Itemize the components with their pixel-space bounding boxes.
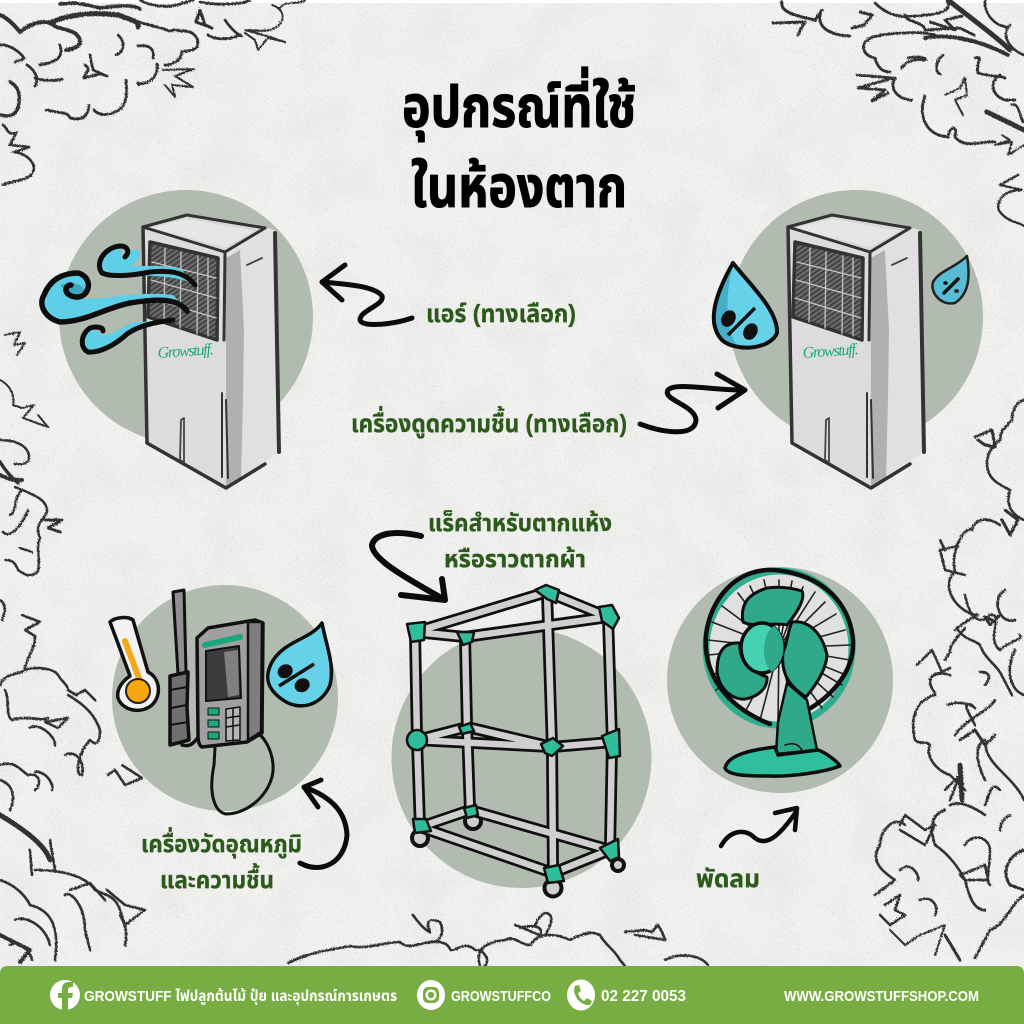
phone number: 02 227 0053 (601, 988, 686, 1005)
label: drying rack: แร็คสำหรับตากแห้ง (428, 509, 612, 537)
label: dehumidifier: เครื่องดูดความชื้น (ทางเลือก) (351, 406, 627, 439)
fan blades (717, 587, 827, 699)
arrow: to dehumidifier (640, 374, 745, 432)
brand script: Growstuff. (802, 341, 859, 362)
arrow: to air cooler (322, 265, 412, 324)
air grille (148, 242, 218, 340)
illustration: drying rack (407, 585, 624, 896)
title: ในห้องตาก (411, 155, 627, 220)
icon: facebook (50, 980, 80, 1010)
foliage: right edge (875, 400, 1024, 960)
illustration: thermometer (110, 618, 158, 710)
fan base (725, 747, 840, 776)
fan stand (776, 683, 817, 754)
title: อุปกรณ์ที่ใช้ (402, 66, 636, 142)
icon: small humidity drop (932, 256, 969, 303)
brand script: Growstuff. (157, 341, 214, 362)
label: drying rack (428, 509, 612, 573)
arrow: to drying rack (372, 533, 445, 600)
foliage: small left cluster (3, 125, 34, 185)
label: temperature and humidity meter (141, 827, 302, 894)
wheels (412, 813, 624, 896)
title (402, 66, 636, 220)
arrow: to meter (300, 780, 347, 867)
teal connectors (407, 585, 620, 883)
icon: instagram (417, 980, 445, 1010)
foliage: bottom left corner (0, 600, 145, 962)
label: air conditioner: แอร์ (ทางเลือก) (426, 300, 576, 328)
air grille (793, 242, 863, 340)
tube fills (415, 592, 612, 873)
arrow: to fan (721, 808, 797, 846)
illustration: dehumidifier (788, 215, 924, 488)
foliage: bottom centre (288, 913, 708, 966)
circle backgrounds (59, 190, 983, 888)
label: temperature and humidity meter: และความชื้น (160, 863, 274, 894)
wind swirl: bottom (82, 320, 173, 352)
fan hub (741, 623, 783, 673)
fan cage (706, 570, 853, 725)
illustration: temperature and humidity meter (170, 590, 273, 814)
wind swirl: middle (42, 273, 187, 322)
instagram name: GROWSTUFFCO (451, 988, 551, 1005)
label: temperature and humidity meter: เครื่องวัดอุณหภูมิ (141, 827, 302, 859)
icon: phone (567, 980, 595, 1010)
device body (197, 620, 263, 747)
wind swirl: top (99, 246, 195, 285)
probe (170, 590, 201, 746)
tube outlines (415, 592, 612, 873)
icon: large humidity drop (714, 263, 777, 348)
foliage: top right corner (773, 0, 1024, 226)
page name: GROWSTUFF ไฟปลูกต้นไม้ ปุ๋ย และอุปกรณ์การเกษตร (84, 987, 397, 1006)
website: WWW.GROWSTUFFSHOP.COM (784, 988, 979, 1005)
label: drying rack: หรือราวตากผ้า (444, 545, 586, 573)
foliage: top left corner (0, 0, 305, 119)
footer bar (0, 966, 1024, 1024)
icon: humidity drop (268, 623, 331, 706)
label: fan: พัดลม (696, 865, 760, 893)
foliage: left edge upper (0, 332, 62, 575)
illustration: desk fan (706, 570, 853, 776)
cable (212, 734, 273, 814)
illustration: air cooler with wind (42, 215, 279, 488)
